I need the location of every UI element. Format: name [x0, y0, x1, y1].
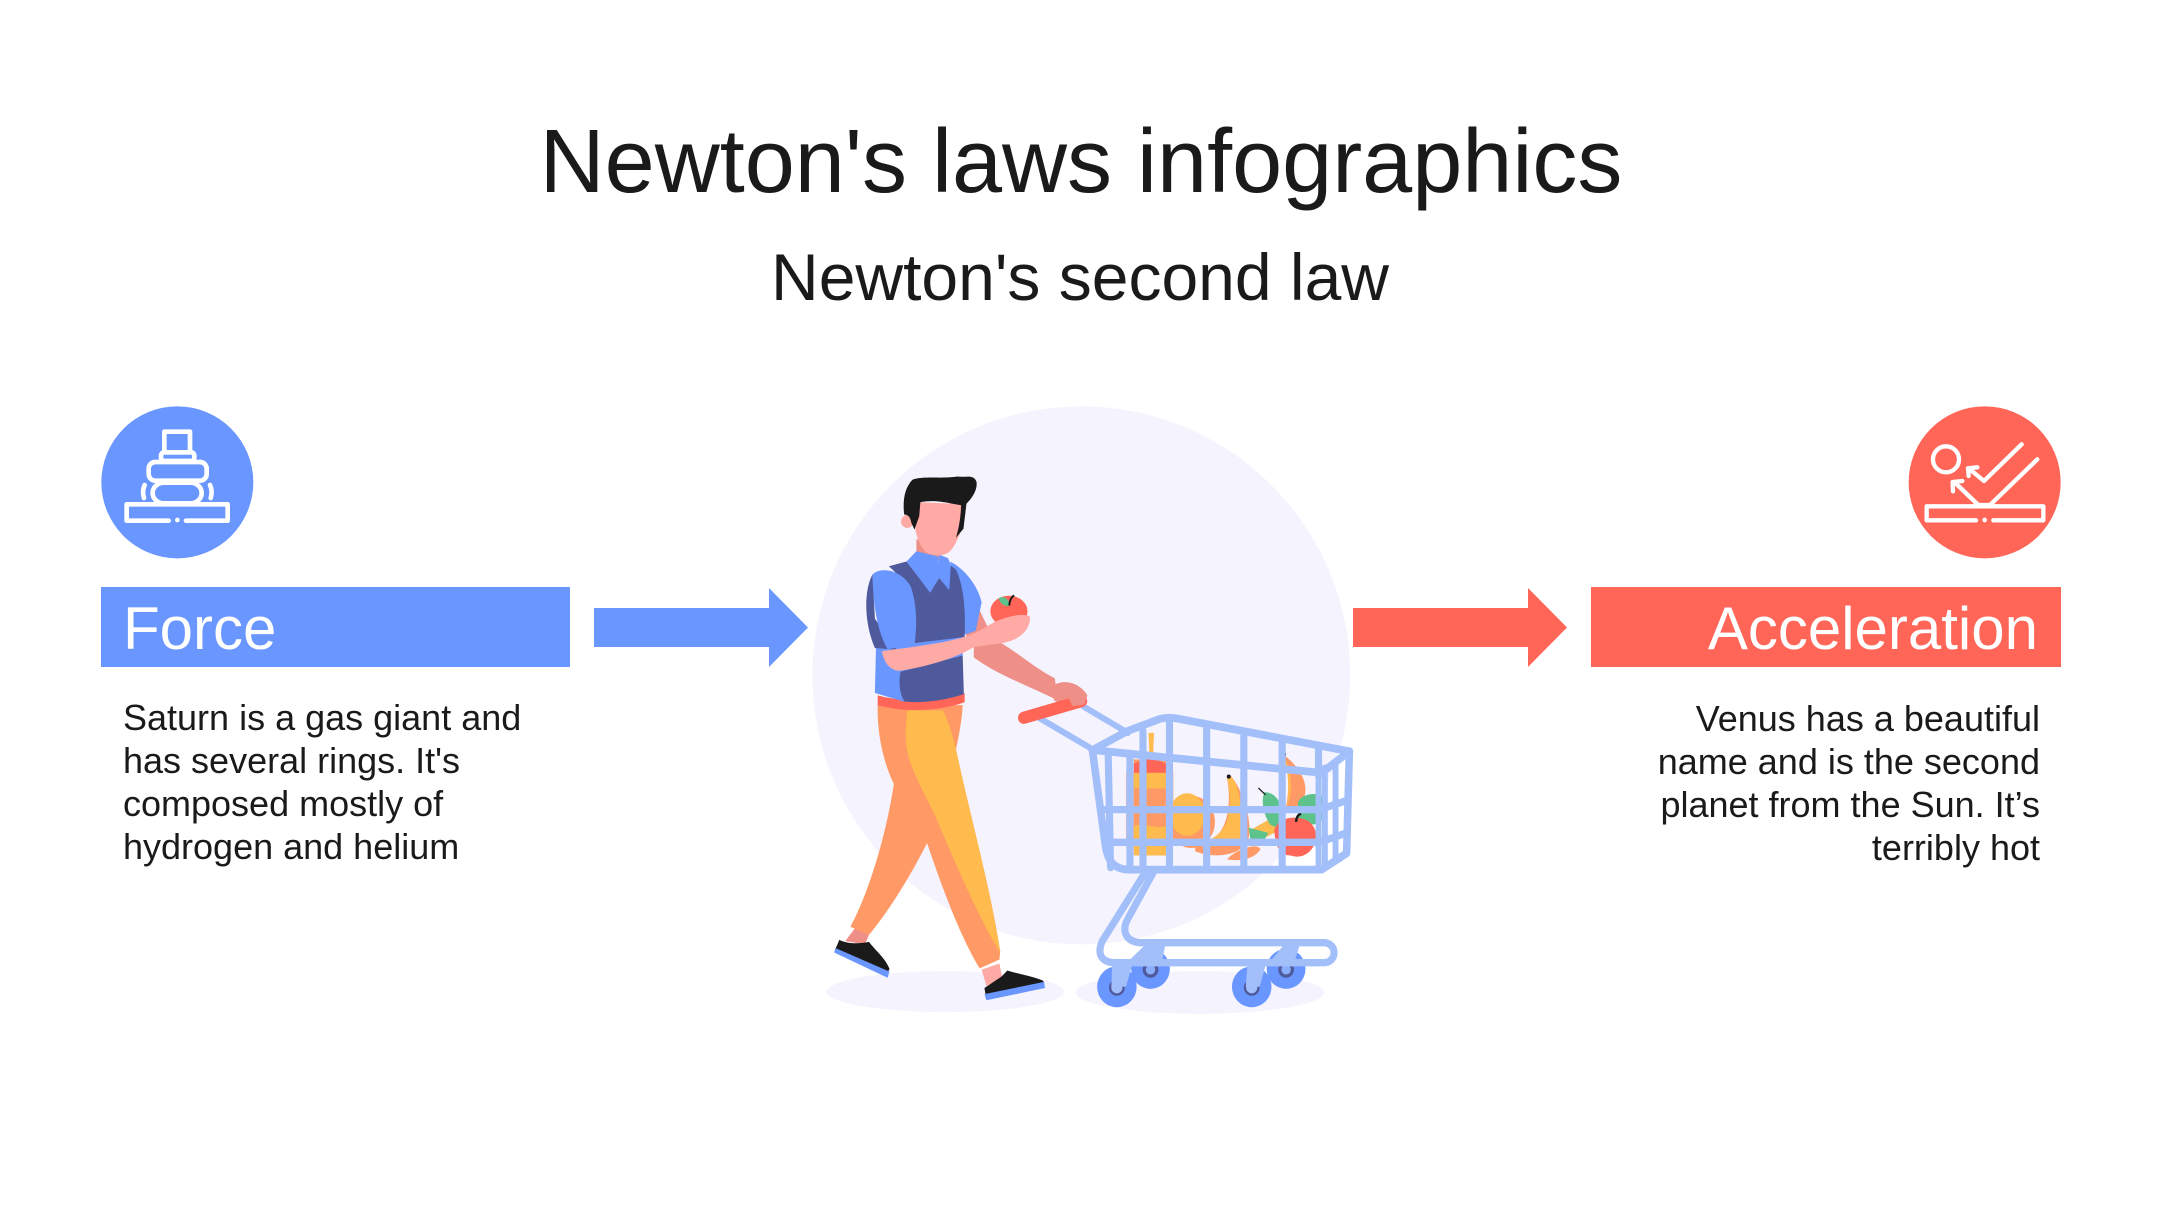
text block: force description [123, 697, 521, 867]
shadow: cart [1076, 971, 1324, 1014]
text block: acceleration description [1658, 698, 2040, 868]
panel: acceleration heading bar [1591, 587, 2061, 667]
text block: acceleration description: terribly hot [1872, 827, 2040, 868]
hand on handle [1050, 684, 1087, 706]
illustration: man pushing shopping cart [812, 406, 1350, 1014]
cart handle [1024, 701, 1081, 718]
cart casters [1111, 944, 1300, 993]
icon: acceleration ball and ramp [1909, 406, 2061, 558]
arrow: cart to acceleration [1353, 588, 1567, 667]
cart wheels [1097, 949, 1305, 1007]
shopping cart frame [1039, 706, 1349, 963]
text block: force description: Saturn is a gas giant and [123, 697, 521, 738]
arrow: force to cart [594, 588, 808, 667]
panel: force heading bar: Force [123, 595, 276, 662]
text block: acceleration description: planet from the Sun. It’s [1660, 784, 2040, 825]
title: Newton's laws infographics [540, 112, 1622, 212]
background circle [812, 406, 1350, 944]
panel: force heading bar [101, 587, 570, 667]
text block: force description: has several rings. It's [123, 740, 460, 781]
text block: acceleration description: name and is the second [1658, 741, 2040, 782]
shadow: man [827, 971, 1064, 1012]
icon: force stacked stones [101, 406, 253, 558]
groceries in cart [1126, 733, 1326, 860]
man figure [834, 477, 1087, 1000]
subtitle: Newton's second law [771, 240, 1389, 314]
text block: force description: composed mostly of [123, 783, 443, 824]
panel: acceleration heading bar: Acceleration [1708, 595, 2038, 662]
text block: force description: hydrogen and helium [123, 826, 459, 867]
text block: acceleration description: Venus has a beautiful [1696, 698, 2040, 739]
